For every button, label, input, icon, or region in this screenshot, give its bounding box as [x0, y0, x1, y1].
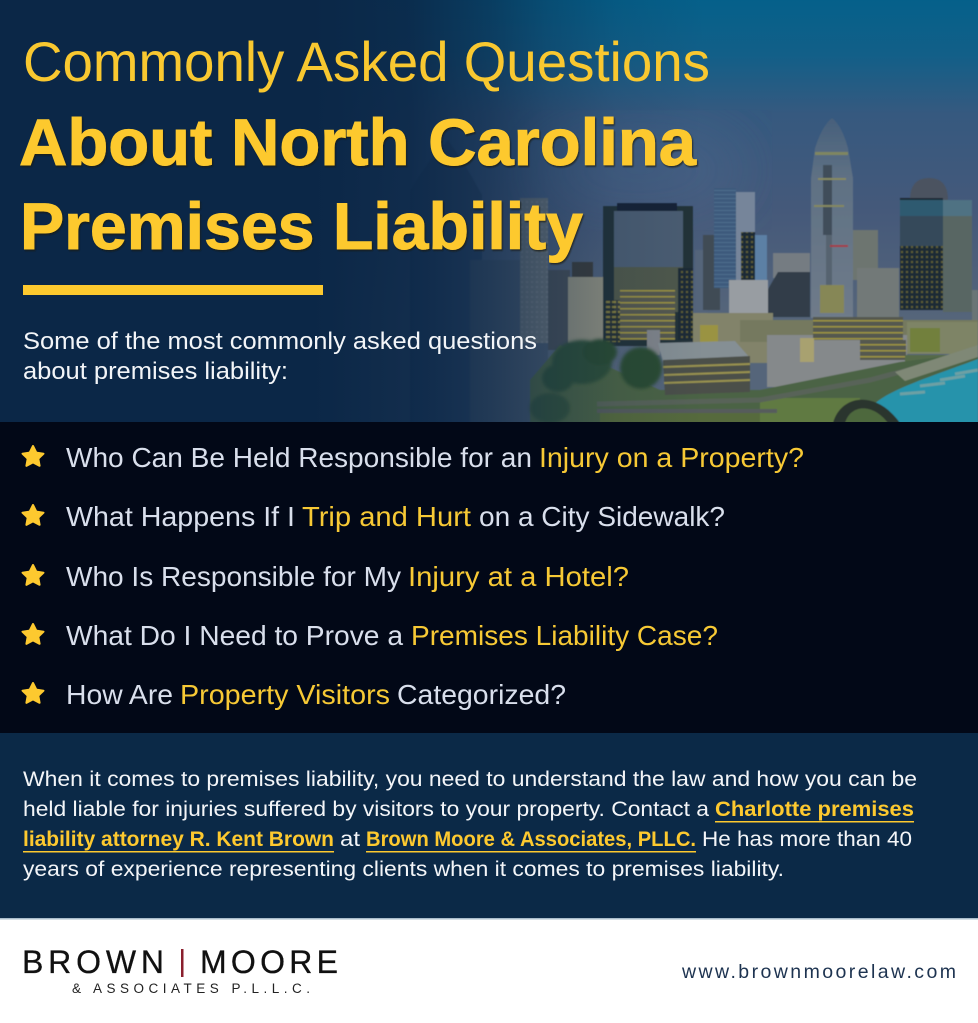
question 2	[22, 501, 725, 532]
question 1	[22, 442, 804, 473]
question 3: Injury at a Hotel?	[408, 561, 629, 592]
closing paragraph: held liable for injuries suffered by visitors to your property. Contact a	[23, 798, 709, 821]
skyline photo illustration	[410, 118, 978, 423]
mid-town background buildings	[548, 270, 570, 350]
title: About North Carolina: About North Carolina	[19, 105, 697, 179]
towers right of centre	[853, 230, 878, 280]
intro text: Some of the most commonly asked questions	[23, 328, 537, 355]
trees	[530, 339, 662, 423]
question 2: on a City Sidewalk?	[479, 501, 725, 532]
question 4	[22, 620, 718, 651]
logo: Brown Moore & Associates: MOORE	[200, 944, 338, 980]
question 4: Premises Liability Case?	[411, 620, 718, 651]
closing text panel	[0, 733, 978, 919]
question 2: Trip and Hurt	[302, 501, 471, 532]
teal stadium roof	[863, 359, 978, 423]
question 1: Who Can Be Held Responsible for an	[66, 442, 532, 473]
closing paragraph: at	[340, 828, 360, 851]
website url: www.brownmoorelaw.com	[681, 961, 956, 983]
closing paragraph: liability attorney R. Kent Brown	[23, 828, 334, 851]
questions panel	[0, 422, 978, 733]
right glass tower	[910, 178, 948, 200]
question 5: Categorized?	[397, 679, 566, 710]
question 2: What Happens If I	[66, 501, 295, 532]
central towers	[695, 250, 707, 315]
closing paragraph: When it comes to premises liability, you need to understand the law and how you can be	[23, 768, 917, 791]
ghost foreground tower	[410, 140, 482, 423]
ground	[530, 345, 978, 423]
title underline bar	[23, 285, 323, 295]
footer panel	[0, 918, 978, 1023]
question 4: What Do I Need to Prove a	[66, 620, 403, 651]
parking garage	[647, 330, 660, 355]
intro text	[23, 328, 537, 385]
closing paragraph: Brown Moore & Associates, PLLC.	[366, 828, 696, 851]
question 1: Injury on a Property?	[539, 442, 804, 473]
closing paragraph	[23, 768, 917, 881]
podium	[693, 313, 773, 363]
question 5: How Are	[66, 679, 173, 710]
logo: Brown Moore & Associates: & ASSOCIATES P.L.L.C.	[72, 981, 310, 996]
question 3	[22, 561, 629, 592]
closing paragraph: Charlotte premises	[715, 798, 914, 821]
title: Commonly Asked Questions: Commonly Asked Questions	[23, 30, 710, 93]
question 5: Property Visitors	[180, 679, 390, 710]
intro text: about premises liability:	[23, 358, 288, 385]
question 5	[22, 679, 566, 710]
closing paragraph: years of experience representing clients when it comes to premises liability.	[23, 858, 784, 881]
logo: Brown Moore & Associates	[22, 944, 338, 996]
logo: Brown Moore & Associates: BROWN	[22, 944, 164, 980]
title: Premises Liability: Premises Liability	[20, 189, 583, 263]
Bank of America tower	[811, 118, 853, 318]
closing paragraph: He has more than 40	[702, 828, 912, 851]
question 3: Who Is Responsible for My	[66, 561, 401, 592]
rail line	[597, 356, 960, 404]
dark glass tower	[603, 206, 693, 346]
header panel with Charlotte skyline	[0, 0, 978, 423]
